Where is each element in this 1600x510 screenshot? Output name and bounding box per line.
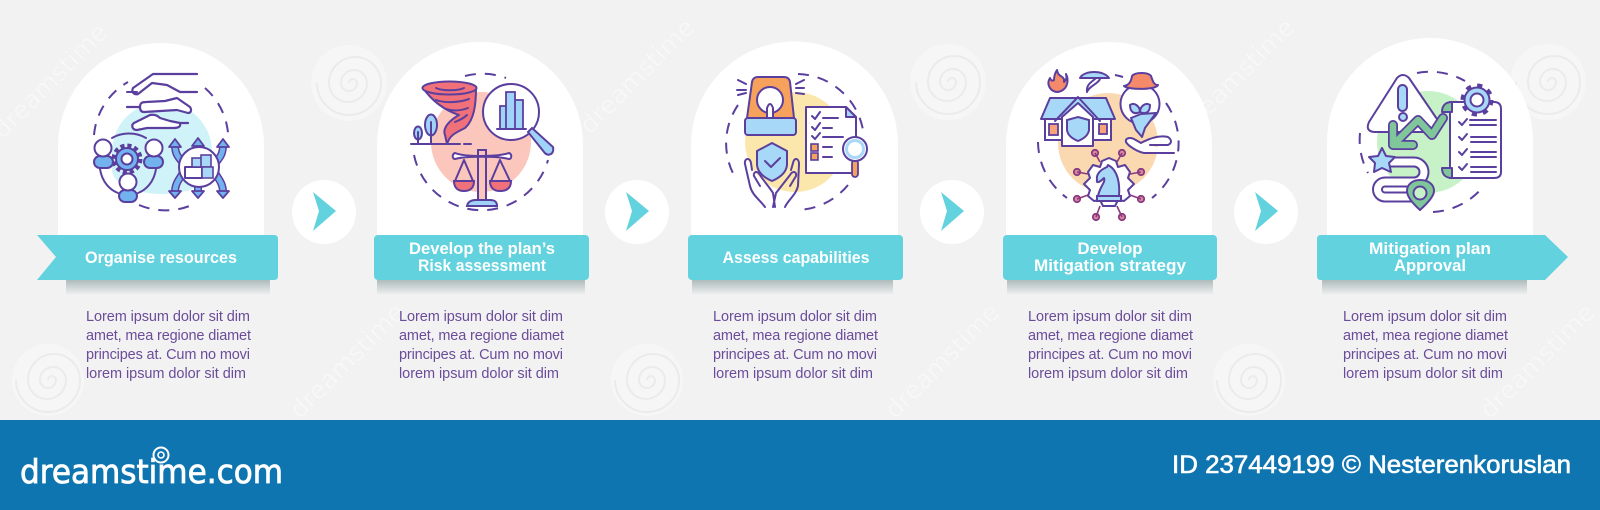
text block 4 (1028, 309, 1193, 382)
text block 4: lorem ipsum dolor sit dim (1028, 366, 1188, 382)
watermark layer: dreamstime (1174, 13, 1300, 139)
ribbon: mitigation strategy (1003, 235, 1217, 280)
image id and author: ID 237449199 © Nesterenkoruslan (1172, 451, 1571, 479)
text block 2: lorem ipsum dolor sit dim (399, 366, 559, 382)
text block 3: amet, mea regione diamet (713, 328, 878, 344)
text block 1: amet, mea regione diamet (86, 328, 251, 344)
footer bar (0, 420, 1600, 510)
text block 2: amet, mea regione diamet (399, 328, 564, 344)
ribbon: mitigation strategy: Mitigation strategy (1034, 256, 1187, 275)
text block 2 (399, 309, 564, 382)
ribbon: risk assessment: Develop the plan’s (409, 239, 555, 258)
panel: organise resources (37, 43, 278, 382)
text block 1: Lorem ipsum dolor sit dim (86, 309, 250, 325)
ribbon: organise resources: Organise resources (85, 248, 237, 267)
icon: siren, checklist and shield (726, 74, 867, 210)
text block 5: Lorem ipsum dolor sit dim (1343, 309, 1507, 325)
ribbon: plan approval: Mitigation plan (1369, 239, 1491, 258)
panel: assess capabilities (688, 42, 903, 382)
icon: warning, checklist and route (1360, 72, 1501, 212)
text block 3 (713, 309, 878, 382)
icon: tornado, chart magnifier and scales (411, 74, 553, 210)
ribbon: assess capabilities: Assess capabilities (722, 248, 870, 267)
text block 4: principes at. Cum no movi (1028, 347, 1192, 363)
text block 3: principes at. Cum no movi (713, 347, 877, 363)
arrow 1 (292, 180, 356, 244)
arrow 2 (605, 180, 669, 244)
text block 2: principes at. Cum no movi (399, 347, 563, 363)
text block 3: Lorem ipsum dolor sit dim (713, 309, 877, 325)
ribbon: assess capabilities (688, 235, 903, 280)
text block 2: Lorem ipsum dolor sit dim (399, 309, 563, 325)
ribbon: risk assessment: Risk assessment (418, 256, 546, 275)
watermark layer: dreamstime (1474, 298, 1600, 424)
text block 1: lorem ipsum dolor sit dim (86, 366, 246, 382)
watermark layer: dreamstime (574, 13, 700, 139)
text block 3: lorem ipsum dolor sit dim (713, 366, 873, 382)
icon: hands, team and resources (94, 74, 229, 210)
panel: plan approval (1317, 38, 1568, 382)
text block 5: amet, mea regione diamet (1343, 328, 1508, 344)
watermark layer: dreamstime (879, 298, 1005, 424)
ribbon: plan approval (1317, 235, 1568, 280)
text block 5: lorem ipsum dolor sit dim (1343, 366, 1503, 382)
panel: risk assessment (374, 42, 589, 382)
text block 1: principes at. Cum no movi (86, 347, 250, 363)
ribbon: plan approval: Approval (1394, 256, 1466, 275)
text block 4: Lorem ipsum dolor sit dim (1028, 309, 1192, 325)
ribbon: organise resources (37, 235, 278, 280)
icon: house, farmer and chess knight (1038, 70, 1179, 220)
watermark layer: dreamstime (284, 298, 410, 424)
ribbon: risk assessment (374, 235, 589, 280)
text block 1 (86, 309, 251, 382)
arrow 3 (920, 180, 984, 244)
text block 4: amet, mea regione diamet (1028, 328, 1193, 344)
arrow 4 (1234, 180, 1298, 244)
text block 5 (1343, 309, 1508, 382)
text block 5: principes at. Cum no movi (1343, 347, 1507, 363)
ribbon: mitigation strategy: Develop (1078, 239, 1142, 258)
logo: dreamstime: dreamstime.com (20, 452, 283, 491)
panel: mitigation strategy (1003, 42, 1217, 382)
